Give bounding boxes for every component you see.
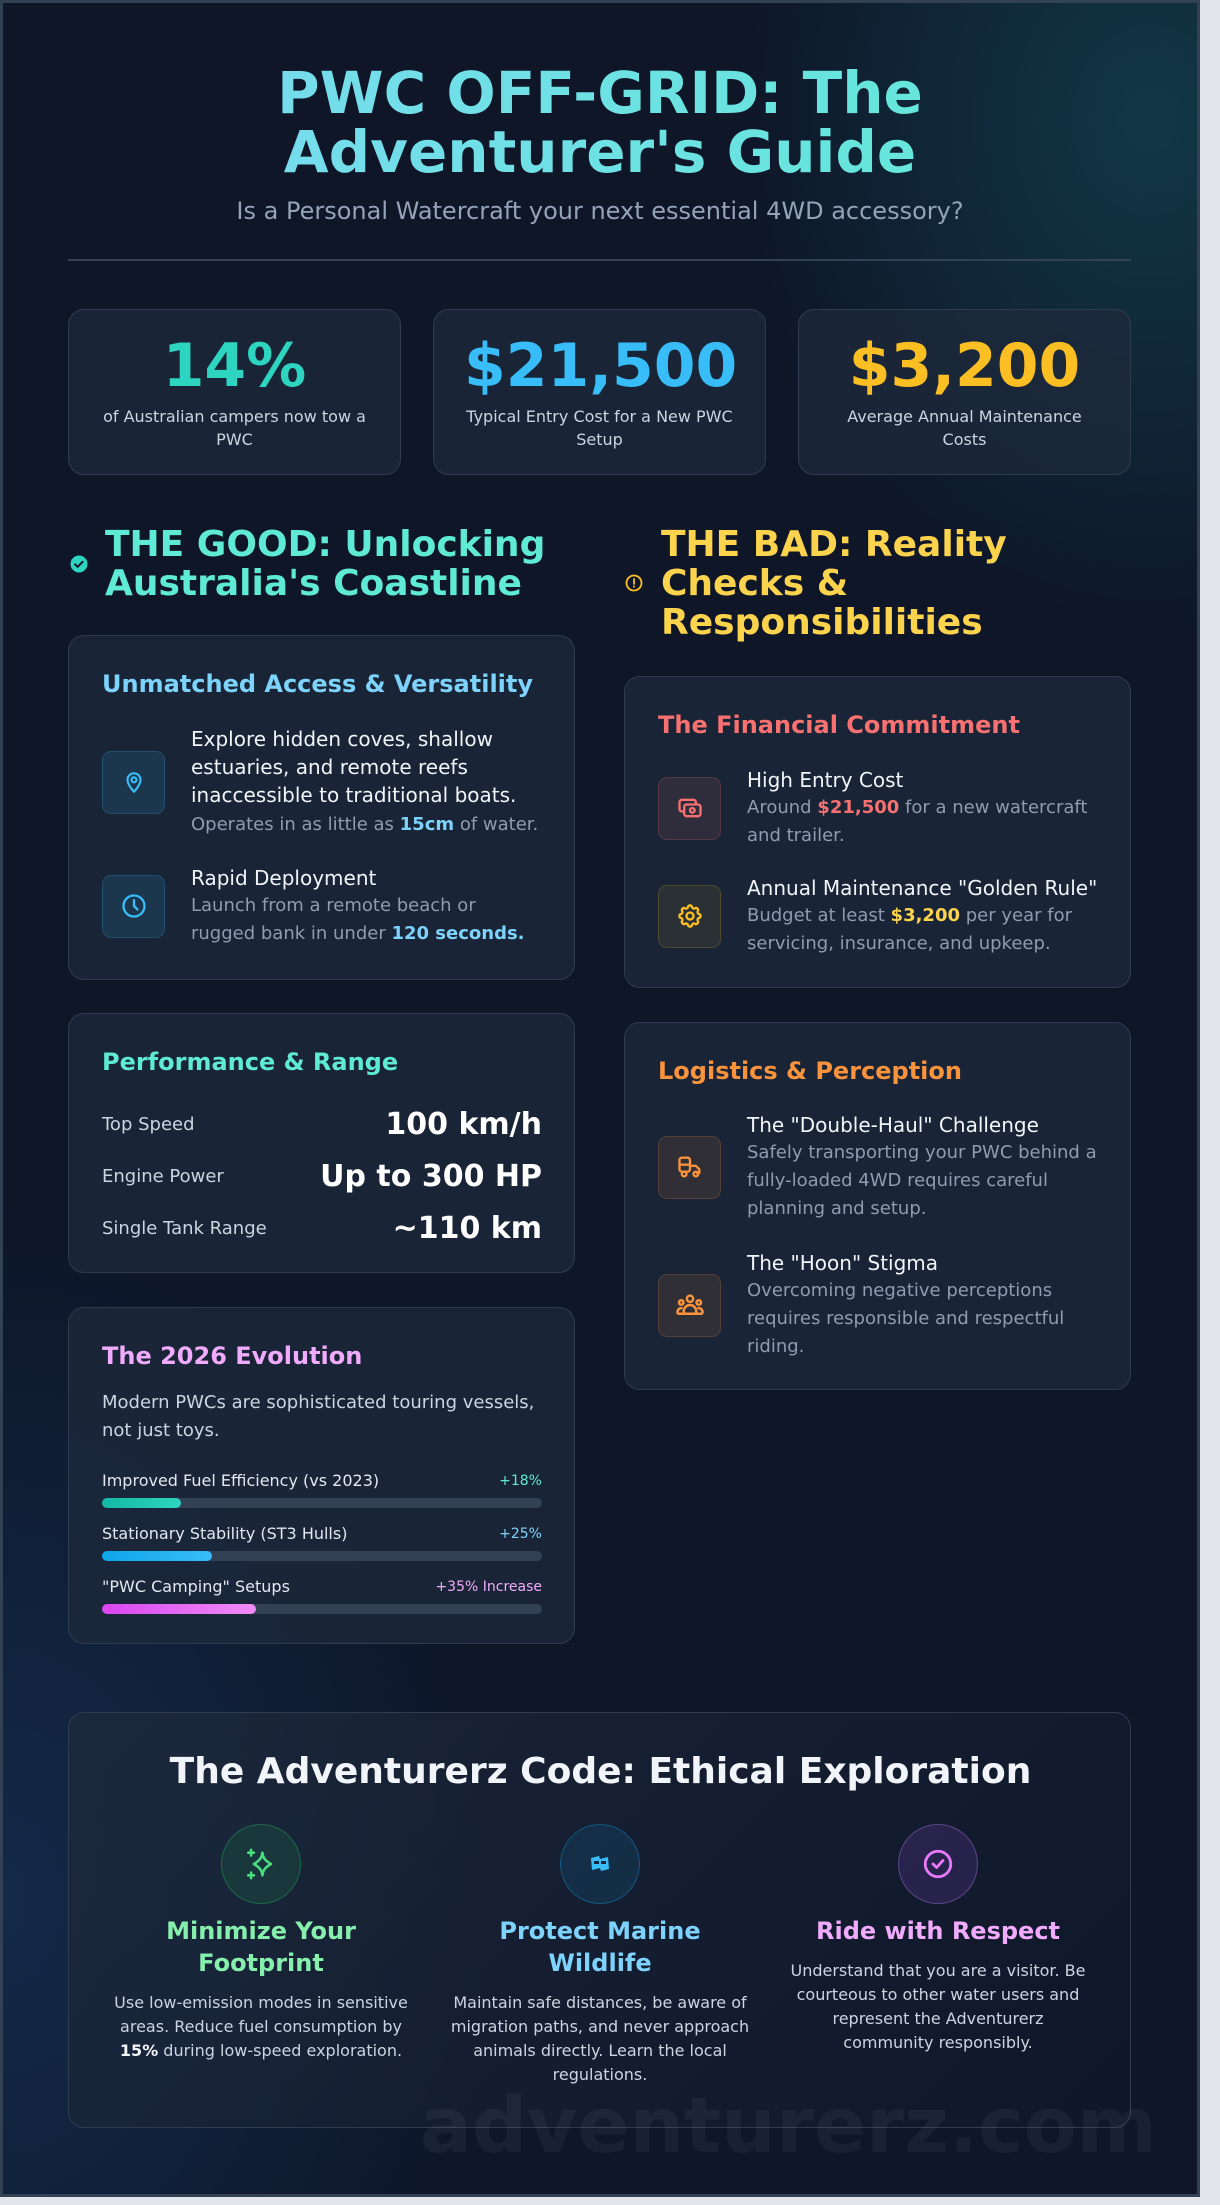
icon: map pin — [102, 750, 165, 814]
icon: check badge — [898, 1824, 978, 1904]
column: protect wildlife: Protect Marine — [499, 1917, 701, 1945]
spec table: Engine Power — [102, 1166, 224, 1186]
spec table: Single Tank Range — [102, 1218, 267, 1238]
stat card: $3,200: Average Annual Maintenance Costs — [847, 407, 1082, 449]
item: hoon stigma: Overcoming negative perceptions requires responsible and respectful riding. — [747, 1280, 1064, 1357]
panel: 2026 evolution — [68, 1307, 575, 1644]
stat card: $3,200 — [798, 309, 1131, 475]
stat card: $21,500: Typical Entry Cost for a New PWC Setup — [466, 407, 733, 449]
column: minimize footprint — [114, 1824, 408, 2060]
item: rapid deployment: Rapid Deployment — [191, 866, 376, 890]
item: maintenance: Annual Maintenance "Golden Rule" — [747, 876, 1097, 900]
bar chart: +25% — [499, 1526, 542, 1542]
card title: The Financial Commitment — [658, 711, 1020, 739]
stat card: $3,200: $3,200 — [849, 331, 1080, 401]
column: minimize footprint: Footprint — [198, 1949, 324, 1977]
item: maintenance: Budget at least $3,200 per year for servicing, insurance, and upkeep. — [747, 905, 1072, 954]
item: hoon stigma: The "Hoon" Stigma — [747, 1251, 938, 1275]
item: high entry cost — [658, 768, 1087, 846]
item: high entry cost: High Entry Cost — [747, 768, 903, 792]
column: ride with respect — [790, 1824, 1086, 2052]
stat card: 14% — [68, 309, 401, 475]
panel: financial commitment — [624, 676, 1131, 988]
heading: the bad — [626, 524, 1007, 643]
stat card: $21,500 — [433, 309, 766, 475]
panel: performance & range — [68, 1013, 575, 1273]
spec table: Top Speed — [102, 1114, 195, 1134]
heading: the good — [70, 524, 545, 604]
heading: the good: THE GOOD: Unlocking — [105, 524, 545, 565]
panel: adventurerz code — [68, 1712, 1131, 2128]
icon: sparkles — [221, 1824, 301, 1904]
column: ride with respect: Understand that you are a visitor. Be courteous to other water users and represent the Adventurerz community responsibly. — [790, 1961, 1086, 2052]
icon: alert circle — [626, 574, 642, 592]
bar chart — [102, 1471, 542, 1614]
spec table: Up to 300 HP — [320, 1158, 542, 1194]
watermark: adventurerz.com — [420, 2082, 1157, 2171]
title — [0, 64, 1200, 182]
item: rapid deployment: Launch from a remote beach or rugged bank in under 120 seconds. — [191, 895, 525, 944]
item: rapid deployment — [102, 866, 525, 944]
icon: check circle — [70, 556, 88, 572]
title: PWC OFF-GRID: The — [277, 59, 923, 127]
item: double haul — [658, 1113, 1097, 1219]
heading: the bad: THE BAD: Reality — [661, 524, 1007, 565]
card title: Performance & Range — [102, 1048, 398, 1076]
subtitle: Is a Personal Watercraft your next essential 4WD accessory? — [236, 197, 964, 225]
icon: cash — [658, 776, 721, 840]
bar chart: "PWC Camping" Setups — [102, 1577, 290, 1596]
card title: Unmatched Access & Versatility — [102, 670, 533, 698]
title: Adventurer's Guide — [284, 118, 916, 186]
spec table: 100 km/h — [385, 1106, 542, 1142]
stat card: 14%: 14% — [163, 331, 306, 401]
bar chart: Stationary Stability (ST3 Hulls) — [102, 1524, 347, 1543]
heading: the good: Australia's Coastline — [105, 563, 522, 604]
panel: unmatched access — [68, 635, 575, 980]
bar chart: +18% — [499, 1473, 542, 1489]
stat card: $21,500: $21,500 — [464, 331, 737, 401]
heading: the bad: Responsibilities — [661, 602, 983, 643]
panel: logistics & perception — [624, 1022, 1131, 1390]
item: maintenance — [658, 876, 1097, 954]
bar chart: +35% Increase — [435, 1579, 542, 1595]
heading: the bad: Checks & — [661, 563, 848, 604]
card title: The 2026 Evolution — [102, 1342, 362, 1370]
icon: gear — [658, 884, 721, 948]
bar chart: Improved Fuel Efficiency (vs 2023) — [102, 1471, 379, 1490]
card title: Logistics & Perception — [658, 1057, 962, 1085]
column: protect wildlife — [451, 1824, 749, 2084]
spec table — [102, 1106, 542, 1246]
stat card: 14%: of Australian campers now tow a PWC — [103, 407, 366, 449]
description: Modern PWCs are sophisticated touring vessels, not just toys. — [102, 1392, 534, 1441]
column: minimize footprint: Minimize Your — [166, 1917, 356, 1945]
column: protect wildlife: Wildlife — [548, 1949, 652, 1977]
item: double haul: Safely transporting your PWC behind a fully-loaded 4WD requires careful planning and setup. — [747, 1142, 1097, 1219]
icon: truck — [658, 1136, 721, 1198]
item: explore — [102, 727, 538, 835]
icon: fish — [560, 1824, 640, 1904]
column: minimize footprint: Use low-emission modes in sensitive areas. Reduce fuel consumption by 15% during low-speed exploration. — [114, 1993, 408, 2060]
column: protect wildlife: Maintain safe distances, be aware of migration paths, and never approach animals directly. Learn the local regulations. — [451, 1993, 749, 2084]
column: ride with respect: Ride with Respect — [816, 1917, 1060, 1945]
panel title: The Adventurerz Code: Ethical Exploration — [170, 1751, 1031, 1792]
item: explore: Explore hidden coves, shallow estuaries, and remote reefs inaccessible to traditional boats. — [191, 727, 516, 807]
icon: clock — [102, 874, 165, 938]
item: high entry cost: Around $21,500 for a new watercraft and trailer. — [747, 797, 1087, 846]
icon: people — [658, 1274, 721, 1336]
spec table: ~110 km — [393, 1210, 542, 1246]
item: explore: Operates in as little as 15cm of water. — [191, 814, 538, 835]
item: double haul: The "Double-Haul" Challenge — [747, 1113, 1039, 1137]
item: hoon stigma — [658, 1251, 1064, 1357]
